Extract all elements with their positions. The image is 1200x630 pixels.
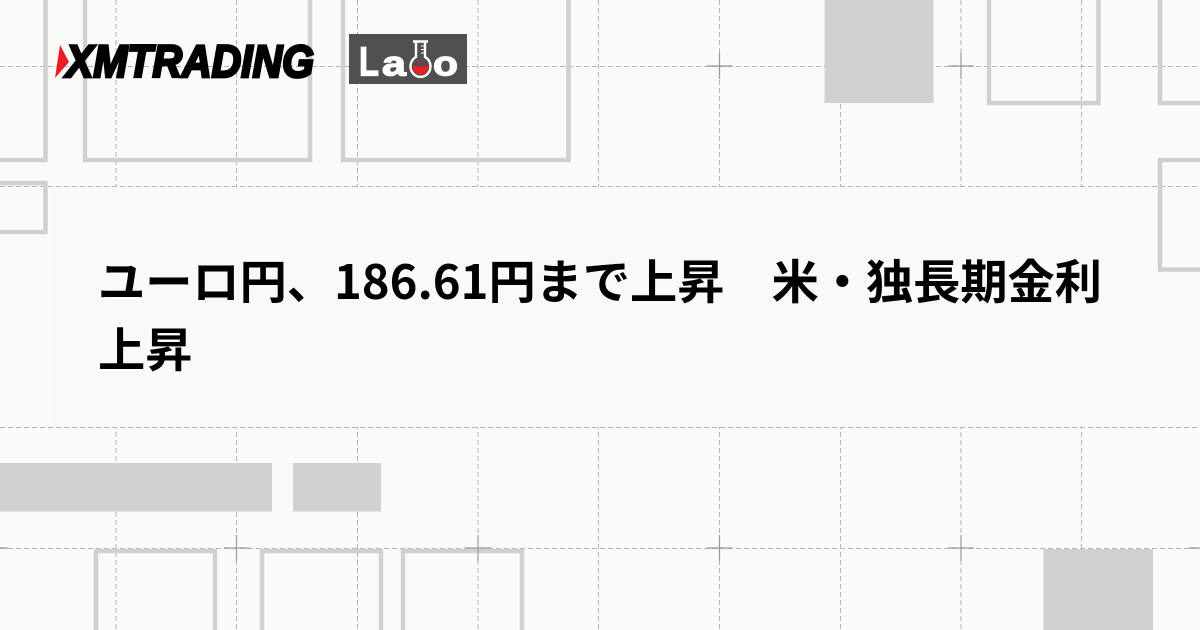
logo: Labo (349, 34, 467, 84)
outlined box: bottom third (403, 551, 522, 630)
logo text: o: o (433, 44, 458, 84)
icon: red arrow (55, 45, 69, 78)
outlined box: left edge (0, 183, 46, 232)
panel: title background (52, 187, 1152, 427)
outlined box: top left second (85, 0, 310, 160)
logo text: L: L (359, 38, 379, 84)
outlined box: top right edge (1160, 0, 1200, 103)
outlined box: bottom first (96, 551, 215, 630)
outlined box: bottom second (262, 551, 381, 630)
filled block: bottom right (1044, 549, 1153, 630)
logo wordmark: XMTRADING (63, 36, 314, 87)
outlined box: top left third (343, 0, 568, 160)
title: 上昇 (98, 312, 192, 381)
logo: XMTRADING (55, 36, 314, 87)
logo background (349, 34, 467, 84)
icon: flask (411, 42, 431, 77)
title: ユーロ円、186.61円まで上昇 米・独長期金利 (98, 244, 1102, 313)
filled bar: bottom left long (0, 463, 272, 512)
filled bar: bottom left short (293, 463, 381, 512)
outlined box: top left edge (0, 0, 46, 160)
outlined box: top right (989, 0, 1098, 103)
filled block: top centre right (824, 0, 934, 103)
outlined box: right edge (1160, 160, 1200, 270)
title (98, 244, 1102, 381)
logo text: a: a (382, 44, 407, 84)
